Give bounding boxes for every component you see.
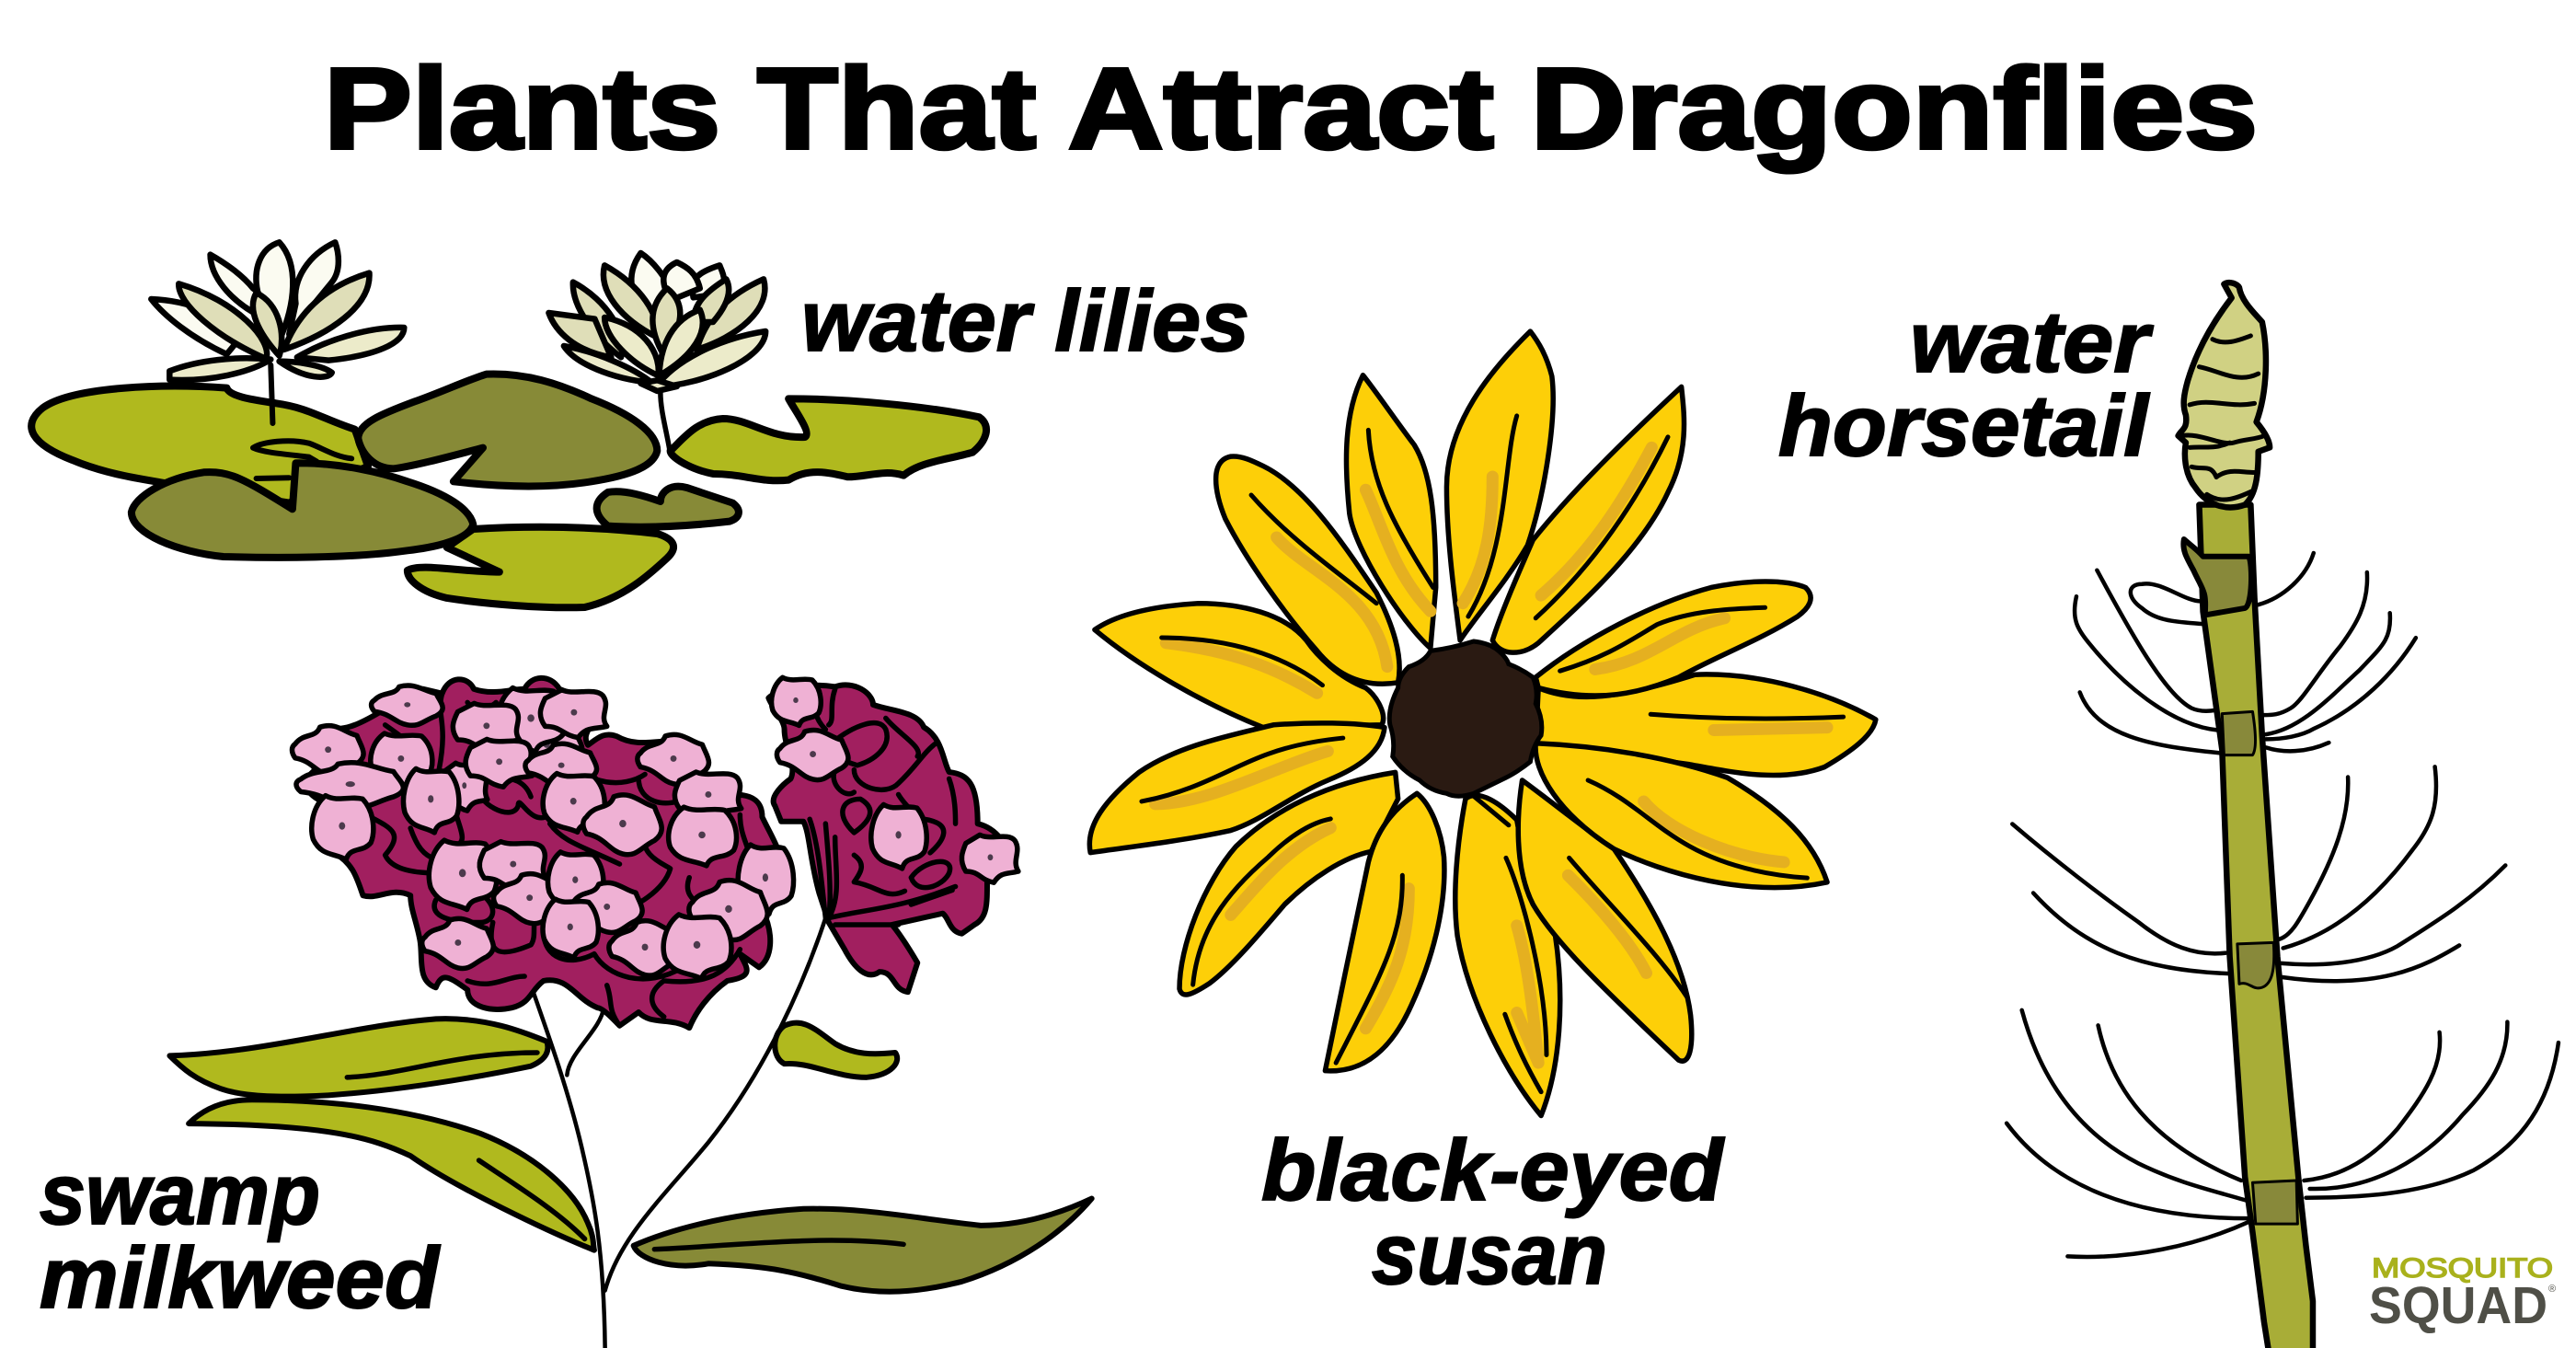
flower cluster: right	[768, 677, 1018, 992]
stem node sheaths	[2183, 539, 2297, 1224]
leaf: lower left	[189, 1100, 594, 1250]
black-eyed susan illustration	[1089, 331, 1876, 1115]
petal: right lower	[1535, 743, 1827, 888]
label: black-eyed susan: susan	[1372, 1205, 1607, 1302]
petal: upper right	[1492, 386, 1685, 652]
leaf: upper left	[169, 1019, 547, 1097]
label: swamp milkweed: milkweed	[40, 1229, 442, 1326]
lily pad: center dark	[358, 374, 657, 486]
logo: Mosquito Squad: MOSQUITO	[2372, 1253, 2553, 1284]
petal: lower left	[1089, 723, 1385, 853]
lily flower: left	[151, 242, 404, 380]
petal: top left	[1346, 375, 1436, 648]
label: water lilies: water lilies	[801, 272, 1249, 369]
label: black-eyed susan	[1261, 1122, 1726, 1302]
lily flower: right	[548, 253, 765, 391]
lily pad: left light	[31, 365, 368, 503]
label: water horsetail	[1778, 294, 2154, 474]
water horsetail illustration	[2007, 282, 2559, 1348]
flower center	[1389, 641, 1542, 796]
stem	[2199, 505, 2313, 1348]
label: swamp milkweed: swamp	[40, 1146, 320, 1242]
petal: lower left second	[1179, 772, 1398, 995]
petal: right upper	[1535, 582, 1811, 696]
swamp milkweed illustration	[169, 677, 1092, 1348]
petal: top	[1446, 331, 1553, 640]
strobilus cone	[2179, 282, 2270, 507]
petal: upper left	[1216, 456, 1399, 684]
lily stem: right	[661, 393, 671, 454]
lily pad: right light	[671, 398, 986, 480]
lily pad: small dark	[597, 487, 739, 527]
lily pad: lower-left dark	[132, 463, 473, 558]
flower cluster: left	[292, 678, 794, 1028]
leaf: small	[775, 1023, 897, 1077]
lily pad: bottom light	[408, 527, 673, 607]
label: water horsetail: water	[1910, 294, 2154, 390]
whorls of thin branches	[2007, 553, 2559, 1257]
stems	[531, 918, 825, 1348]
leaf: right	[634, 1199, 1092, 1292]
petal: left	[1095, 604, 1384, 728]
logo: Mosquito Squad: SQUAD	[2369, 1276, 2547, 1335]
title: Plants That Attract Dragonflies	[324, 45, 2258, 173]
petal: bottom	[1455, 795, 1560, 1115]
water lilies illustration	[31, 242, 986, 607]
petal: bottom left	[1325, 793, 1444, 1071]
label: black-eyed susan: black-eyed	[1261, 1122, 1726, 1218]
florets: pink	[292, 686, 794, 978]
label: swamp milkweed	[40, 1146, 442, 1326]
petal: right	[1535, 674, 1876, 776]
label: water horsetail: horsetail	[1778, 377, 2150, 474]
logo: Mosquito Squad: ®	[2548, 1284, 2556, 1295]
florets: pink	[772, 677, 1018, 882]
petal: lower right	[1518, 780, 1692, 1061]
